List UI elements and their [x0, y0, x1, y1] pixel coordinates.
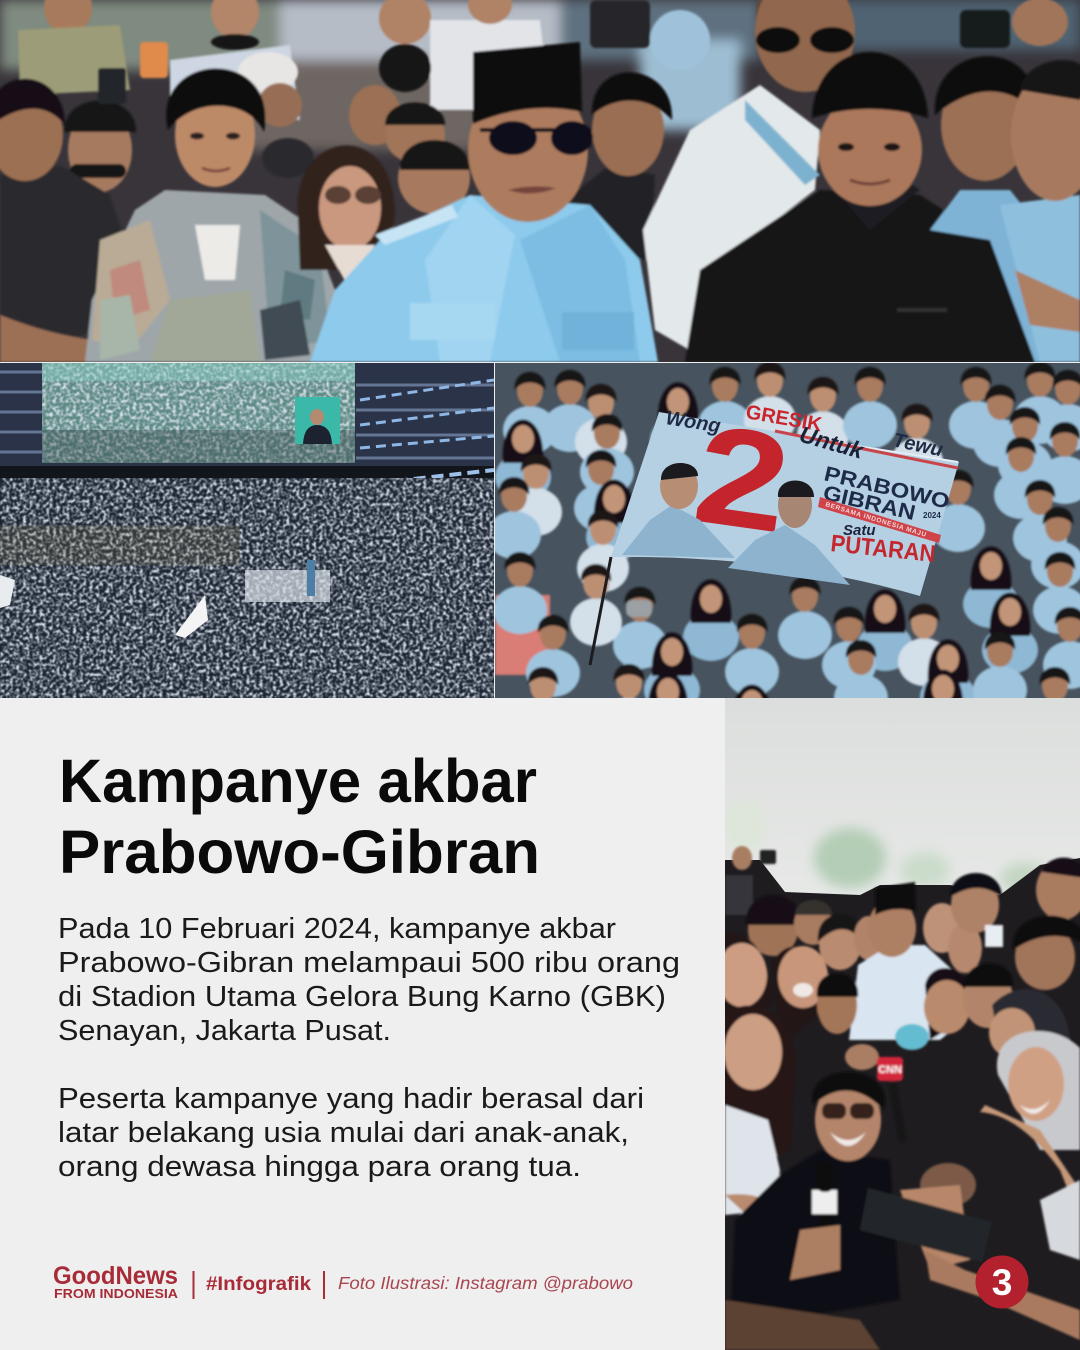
red number 2 on the flag: 2: [686, 394, 799, 563]
footer: GoodNews logo: FROM INDONESIA: [54, 1287, 178, 1301]
left man in dark shirt: [0, 79, 125, 362]
photo: supporters waving Prabowo-Gibran flag: [495, 363, 1080, 698]
bald man in white polo: [643, 0, 855, 362]
flag: PUTARAN: [829, 530, 937, 568]
crowd base: [725, 858, 1080, 1350]
flag: Wong: [664, 407, 722, 438]
woman in sunglasses: [298, 146, 395, 290]
flag: PRABOWO: [822, 462, 952, 514]
Prabowo in light blue shirt and black peci: [310, 42, 658, 362]
Prabowo in white shirt: [849, 882, 965, 1040]
flag: Untuk: [797, 421, 868, 464]
body paragraph 1: Senayan, Jakarta Pusat.: [58, 1015, 391, 1047]
footer dividers: [194, 1271, 324, 1299]
flag: BERSAMA INDONESIA MAJU: [824, 501, 927, 539]
footer: GoodNews logo: [53, 1262, 178, 1301]
page number badge: [976, 1256, 1028, 1308]
flag: GIBRAN: [821, 481, 918, 525]
microphones and fan: CNN: [878, 1064, 902, 1076]
body paragraph 1: Prabowo-Gibran melampaui 500 ribu orang: [58, 947, 680, 979]
body paragraph 2: latar belakang usia mulai dari anak-anak,: [58, 1117, 629, 1149]
body paragraph 1: Pada 10 Februari 2024, kampanye akbar: [58, 913, 616, 945]
body paragraph 2: Peserta kampanye yang hadir berasal dari: [58, 1083, 644, 1115]
title: Kampanye akbar: [59, 747, 537, 815]
footer: GoodNews logo: GoodNews: [53, 1262, 178, 1290]
skin arms and hands: [725, 1105, 1080, 1350]
photo: stadium crowd at Gelora Bung Karno: [0, 363, 494, 698]
phone held toward the camera: [860, 1188, 992, 1262]
top crowd: [18, 0, 1068, 214]
front faces and hair: [717, 933, 1080, 1330]
footer hashtag: #Infografik: [206, 1274, 311, 1295]
supporters crowd: [495, 363, 1080, 698]
photo: Prabowo posing with journalists: [717, 698, 1080, 1350]
right side men in blue shirts: [930, 56, 1080, 362]
text panel: [0, 698, 725, 1350]
photo: Prabowo and Gibran walking through the crowd: [0, 0, 1080, 362]
body paragraph 1: [58, 913, 680, 1047]
flag: 2024: [923, 511, 941, 520]
flag: Satu: [843, 522, 876, 539]
body paragraph 2: [58, 1083, 644, 1183]
big screen: [295, 397, 340, 444]
man in dark shirt behind Prabowo: [565, 72, 672, 262]
upper stand crowd: [42, 363, 355, 463]
trees behind the tent: [730, 806, 1043, 894]
stage rigging: [0, 363, 494, 478]
back row faces: [725, 846, 1080, 990]
title: [59, 747, 540, 886]
page number badge: 3: [992, 1262, 1012, 1303]
body paragraph 2: orang dewasa hingga para orang tua.: [58, 1151, 581, 1183]
flag portraits: [622, 463, 850, 585]
main arena crowd: [0, 478, 494, 698]
body paragraph 1: di Stadion Utama Gelora Bung Karno (GBK): [58, 981, 666, 1013]
Gibran in patterned denim jacket: [85, 68, 335, 362]
microphones and fan: [812, 1024, 929, 1254]
title: Prabowo-Gibran: [59, 818, 540, 886]
flag: GRESIK: [744, 401, 824, 436]
flag: Tewu: [891, 429, 945, 461]
footer photo credit: Foto Ilustrasi: Instagram @prabowo: [338, 1273, 633, 1293]
flag: [611, 394, 959, 596]
man in black cap and black shirt: [685, 52, 1036, 362]
